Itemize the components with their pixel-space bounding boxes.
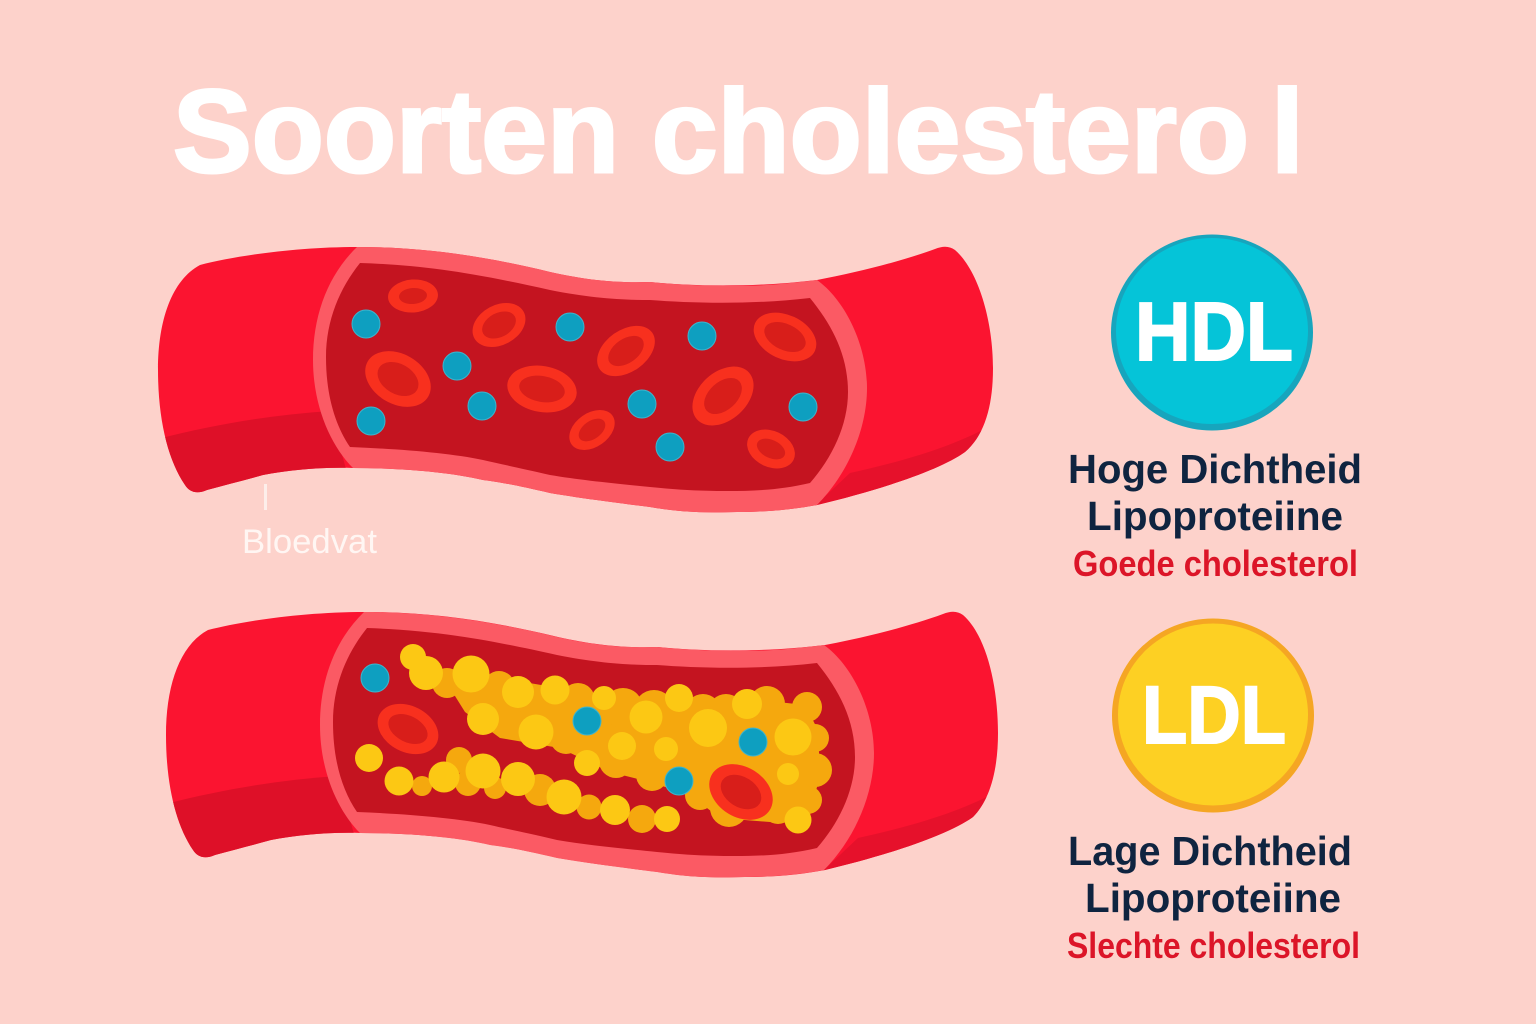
LDL description: Lipoproteiine (1085, 875, 1341, 921)
HDL description: Goede cholesterol (1073, 543, 1358, 584)
cholesterol droplets (355, 644, 812, 834)
LDL description: Lage Dichtheid (1068, 828, 1352, 874)
LDL description (1067, 828, 1360, 966)
LDL badge (1112, 618, 1314, 812)
label: Bloedvat: Bloedvat (242, 523, 378, 561)
vessel wall cut section (313, 247, 867, 512)
panel: clogged blood vessel (158, 612, 1008, 885)
vessel wall cut section (320, 612, 874, 877)
LDL badge: LDL (1142, 670, 1286, 761)
vessel lumen (326, 263, 848, 491)
plaque mass (412, 668, 832, 833)
HDL particles (352, 310, 817, 461)
red blood cells (355, 278, 824, 476)
title: Soorten cholestero (173, 66, 1249, 198)
LDL description: Slechte cholesterol (1067, 925, 1360, 966)
red blood cells (369, 694, 783, 831)
title: l (1271, 66, 1304, 198)
HDL badge: HDL (1135, 285, 1293, 378)
HDL description: Hoge Dichtheid (1068, 446, 1362, 492)
HDL badge (1111, 234, 1313, 430)
vessel outer wall (150, 247, 1000, 520)
HDL description: Lipoproteiine (1087, 493, 1343, 539)
HDL description (1068, 446, 1362, 584)
vessel outer wall (158, 612, 1008, 885)
label: Bloedvat (242, 484, 378, 561)
HDL particles (361, 664, 767, 795)
panel: healthy blood vessel (150, 247, 1000, 520)
vessel lumen (333, 628, 855, 856)
